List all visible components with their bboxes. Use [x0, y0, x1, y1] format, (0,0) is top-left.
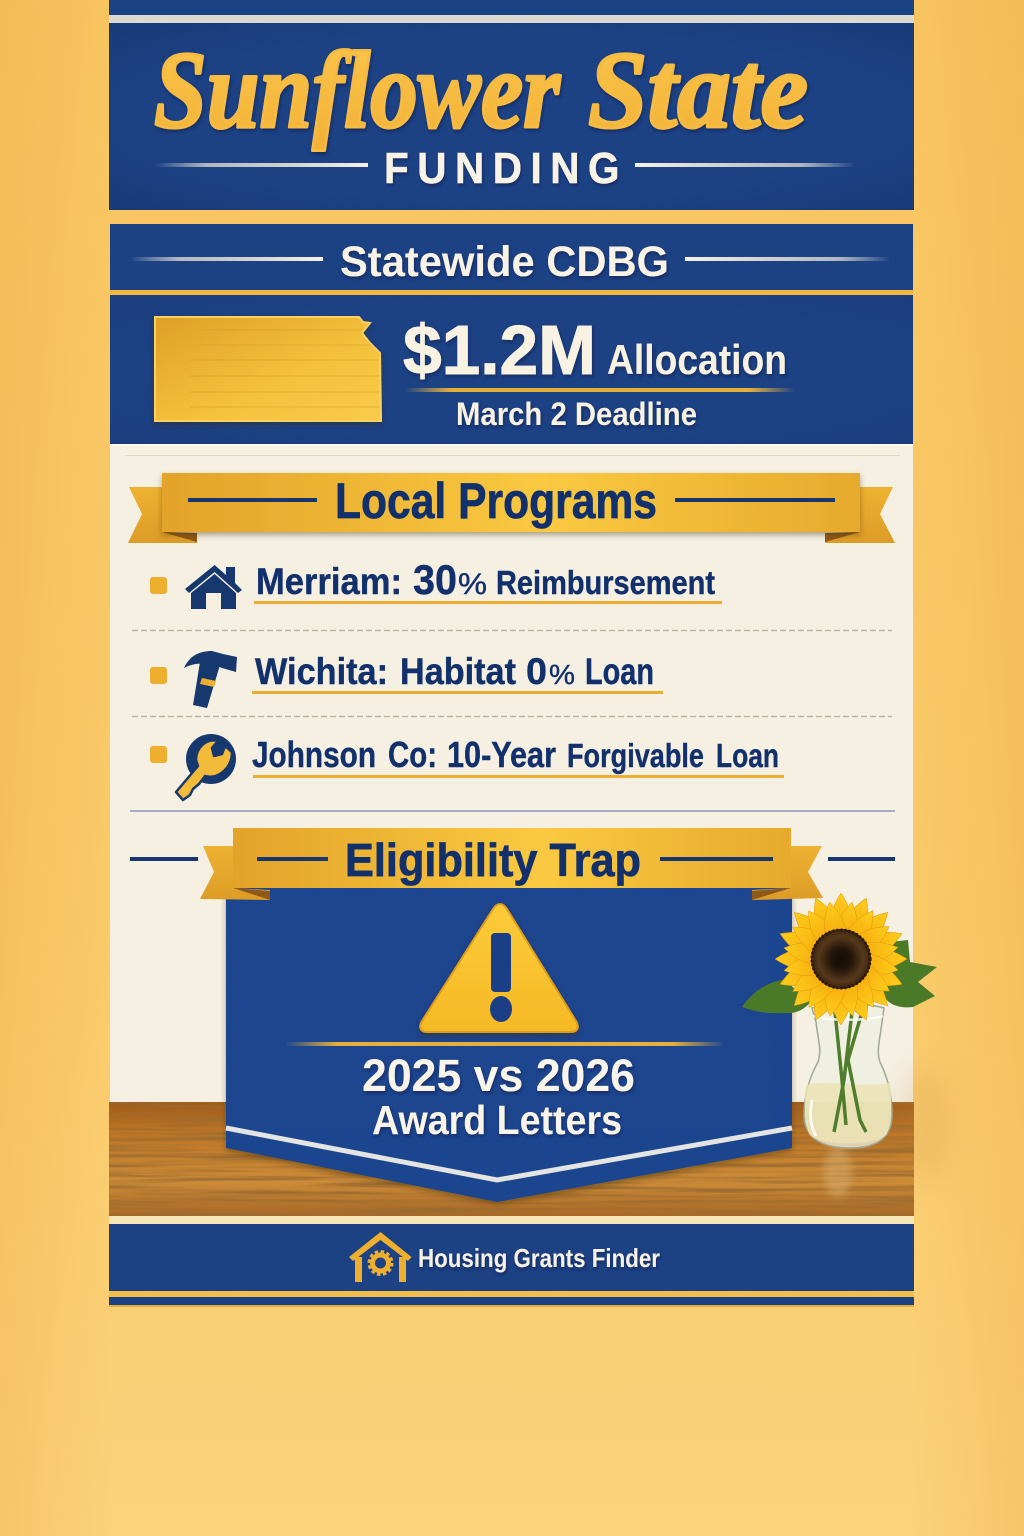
list item: Merriam — [150, 556, 722, 609]
ribbon: Eligibility Trap: Eligibility Trap — [345, 834, 641, 886]
subtitle: FUNDING — [155, 143, 855, 192]
icon: hammer — [184, 651, 237, 708]
label: Wichita — [255, 651, 654, 692]
panel: allocation — [110, 295, 913, 444]
label: Merriam: 30 — [413, 556, 457, 603]
panel: cream background — [110, 444, 913, 1104]
icon: Kansas map — [155, 317, 381, 421]
title: Sunflower State: Sunflower — [154, 29, 561, 151]
label: Wichita: % — [549, 659, 575, 690]
label: Merriam: Reimbursement — [496, 564, 715, 601]
divider: gold band — [110, 290, 913, 295]
footer stripes — [109, 1291, 914, 1307]
text: Award Letters: Award Letters — [372, 1097, 622, 1143]
amount: $1.2M Allocation: $1.2M — [403, 311, 596, 389]
divider — [130, 810, 895, 812]
list item: Johnson Co — [150, 734, 784, 800]
divider — [132, 716, 892, 718]
label: Johnson Co: Forgivable — [567, 737, 704, 774]
petals — [775, 893, 907, 1025]
label: Johnson Co: Johnson — [252, 734, 376, 775]
icon: sunflower in glass vase — [742, 893, 937, 1198]
side lines: Eligibility Trap — [130, 857, 895, 861]
ribbon: Local Programs: Local Programs — [335, 473, 657, 529]
vase — [804, 1004, 892, 1198]
label: Wichita: 0 — [526, 651, 547, 692]
panel: title — [109, 23, 914, 210]
text: 2025 vs 2026: 2025 vs 2026 — [362, 1050, 635, 1101]
soft shadow right of table — [899, 1065, 951, 1185]
panel: statewide CDBG header: Statewide CDBG — [340, 238, 669, 286]
list item: Wichita — [150, 651, 663, 708]
panel: footer — [109, 1224, 914, 1291]
divider — [132, 630, 892, 632]
ribbon: Local Programs — [128, 473, 895, 543]
label: Johnson Co: 10-Year — [447, 734, 556, 775]
label: Merriam — [256, 556, 715, 603]
ribbon: Eligibility Trap — [200, 828, 823, 900]
icon: house — [185, 565, 242, 609]
panel: statewide CDBG header — [110, 224, 913, 290]
deadline: March 2 Deadline — [456, 396, 697, 432]
icon: house with gear logo — [349, 1232, 412, 1282]
label: Merriam: % — [458, 568, 487, 601]
icon: warning triangle — [420, 904, 578, 1032]
top blue stripe — [109, 0, 914, 23]
subtitle: FUNDING: FUNDING — [384, 143, 620, 192]
label: Johnson Co — [252, 734, 779, 775]
label: Johnson Co: Loan — [716, 737, 779, 774]
amount: $1.2M Allocation: Allocation — [607, 336, 787, 383]
amount: $1.2M Allocation — [403, 311, 787, 389]
label: Wichita: Loan — [585, 651, 654, 692]
brand: Housing Grants Finder: Housing Grants Finder — [418, 1243, 660, 1273]
label: Wichita: Habitat — [400, 651, 516, 692]
label: Johnson Co: Co: — [388, 734, 437, 775]
panel: eligibility trap banner — [226, 888, 792, 1202]
title: Sunflower State: State — [588, 29, 808, 151]
label: Wichita: Wichita: — [255, 651, 388, 692]
icon: key — [176, 734, 236, 800]
leaves — [742, 940, 937, 1013]
wood table — [109, 1102, 914, 1224]
label: Merriam: Merriam: — [256, 561, 402, 602]
